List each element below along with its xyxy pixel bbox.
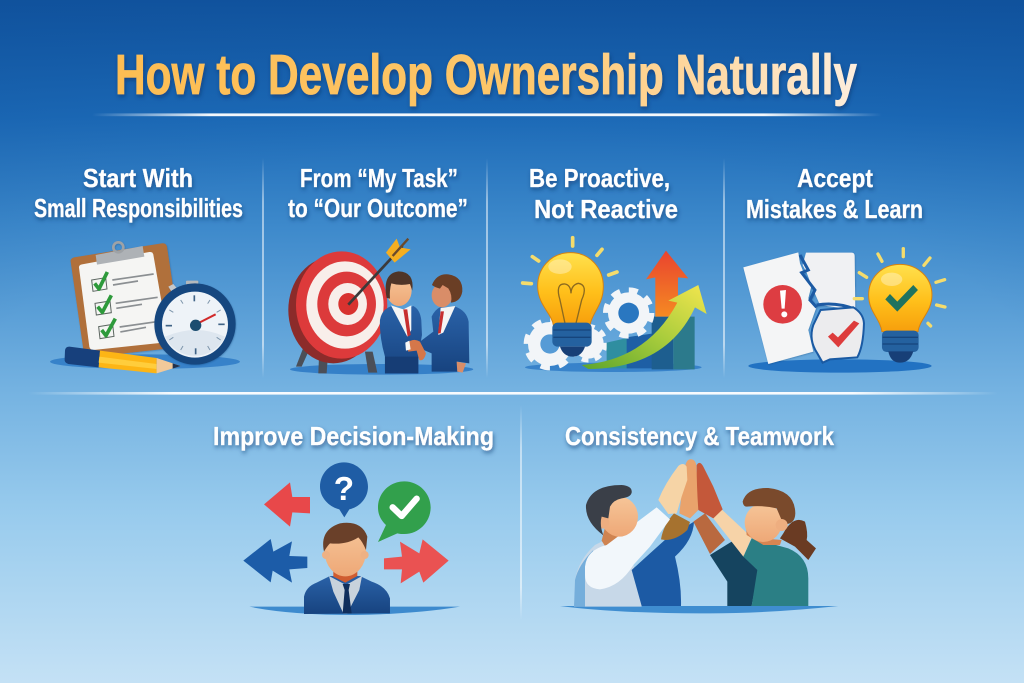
pencil	[65, 347, 181, 373]
heading: be proactive, not reactive	[529, 163, 678, 224]
broken paper	[743, 252, 855, 364]
rays	[523, 238, 617, 284]
heading: be proactive, not reactive: Be Proactive,	[529, 163, 670, 193]
person	[304, 523, 390, 614]
person right	[420, 274, 469, 373]
woman	[693, 488, 816, 606]
question bubble: ?	[334, 471, 354, 508]
blue left arrow	[243, 539, 307, 583]
red up arrow	[646, 251, 688, 317]
lightbulb	[538, 253, 603, 357]
icon: target and handshake	[288, 239, 473, 375]
handshake	[407, 340, 426, 360]
upper gear	[606, 290, 651, 336]
raised hands	[658, 459, 723, 518]
heading: from my task to our outcome	[288, 163, 468, 223]
red left arrow	[264, 482, 310, 527]
heading: consistency and teamwork: Consistency & Teamwork	[565, 421, 834, 451]
bars	[607, 317, 695, 369]
icon: decision-making person with arrows	[243, 462, 460, 615]
person left	[380, 271, 422, 373]
icon: clipboard, stopwatch and pencil	[50, 242, 240, 373]
check bubble	[378, 481, 431, 542]
heading: accept mistakes and learn: Accept	[797, 163, 873, 193]
heading: start with small responsibilities: Small Responsibilities	[34, 193, 243, 223]
icon: broken paper and idea bulb	[743, 249, 945, 373]
stopwatch	[154, 281, 236, 365]
heading: accept mistakes and learn	[746, 163, 923, 224]
icon: lightbulb, gears and growth arrow	[523, 238, 707, 372]
target board	[288, 251, 387, 363]
heading: accept mistakes and learn: Mistakes & Learn	[746, 194, 923, 224]
lower gears	[527, 321, 605, 367]
heading: be proactive, not reactive: Not Reactive	[534, 194, 678, 224]
growth arrow	[582, 285, 707, 369]
ground shadow	[560, 606, 838, 613]
shield check bubble	[812, 307, 864, 363]
target stand	[296, 343, 377, 373]
heading: improve decision-making: Improve Decision-Making	[213, 421, 494, 451]
bulb with check	[869, 264, 932, 363]
question bubble	[320, 462, 368, 517]
arrow in target	[348, 239, 411, 305]
ground shadow	[249, 607, 460, 615]
heading: start with small responsibilities: Start With	[83, 163, 193, 193]
red right arrow	[384, 539, 449, 583]
heading: from my task to our outcome: From “My Task”	[300, 163, 458, 193]
rays	[854, 249, 945, 326]
icon: high five teamwork	[560, 459, 838, 613]
heading: from my task to our outcome: to “Our Outcome”	[288, 193, 468, 223]
man	[574, 485, 694, 607]
heading: start with small responsibilities	[34, 163, 243, 223]
clipboard	[71, 242, 182, 357]
